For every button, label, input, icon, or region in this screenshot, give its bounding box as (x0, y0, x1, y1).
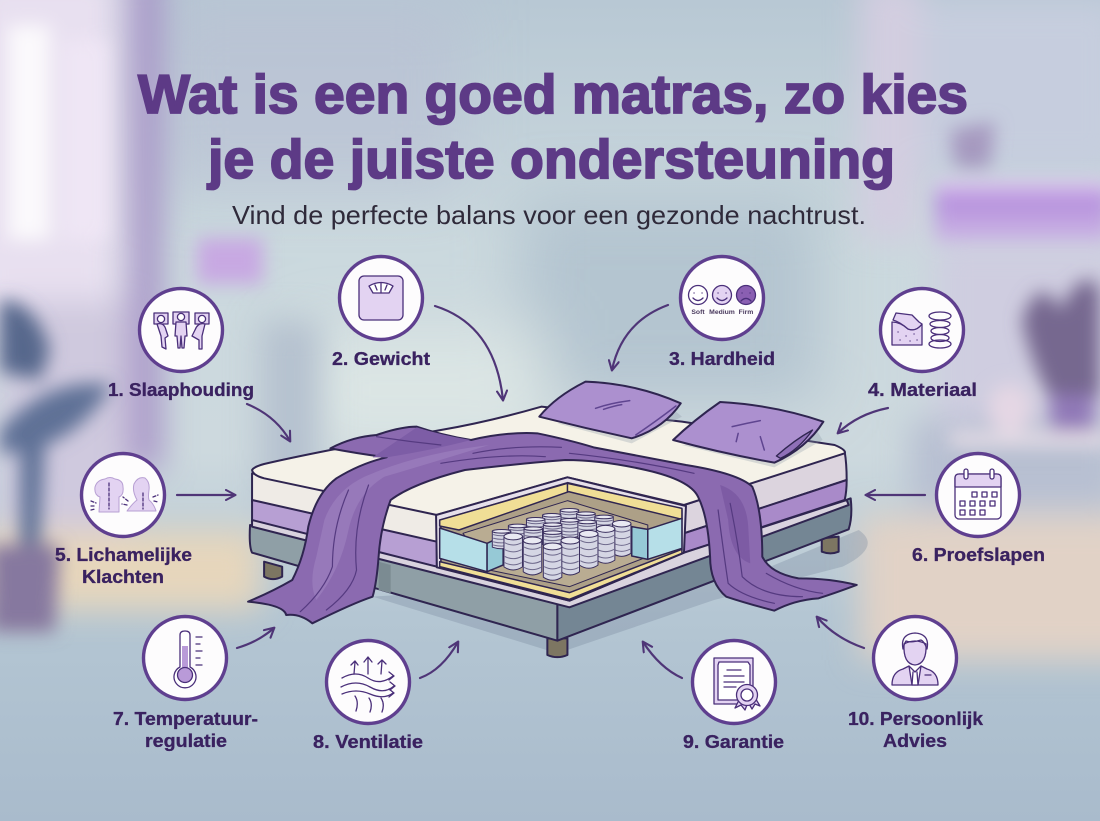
item 1: Slaaphouding (108, 288, 254, 400)
arrow: 6 (866, 494, 925, 496)
bed legs (264, 537, 839, 657)
label: 9. Garantie (683, 732, 784, 752)
label: 4. Materiaal (868, 380, 977, 400)
top comfort layer (440, 483, 682, 530)
arrow: 10 (817, 617, 864, 648)
arrow: 7 (237, 628, 274, 648)
label: 3. Hardheid (669, 349, 775, 369)
bed shadow on floor (373, 530, 868, 653)
subtitle: Vind de perfecte balans voor een gezonde nachtrust. (232, 200, 866, 230)
title (138, 63, 968, 190)
arrow: 2 (435, 306, 503, 400)
icon: weighing scale (340, 256, 422, 340)
icon: advisor in suit (874, 616, 956, 700)
label: 7. Temperatuur- (113, 709, 258, 729)
label: regulatie (145, 731, 227, 751)
item 9: Garantie (683, 640, 784, 752)
pocket springs (492, 509, 631, 580)
icon: back and neck pain (82, 454, 164, 536)
item 5: Lichamelijke Klachten (55, 454, 192, 587)
label (848, 709, 984, 751)
arrow: 3 (612, 305, 668, 370)
mattress bands (252, 452, 849, 607)
item 2: Gewicht (332, 256, 430, 369)
title: Wat is een goed matras, zo kies (138, 63, 968, 125)
arrow: 5 (177, 494, 235, 496)
icon: firmness faces: Soft (691, 309, 705, 316)
icon: thermometer (144, 616, 226, 700)
arrow: 8 (420, 642, 458, 678)
mattress top surface (252, 407, 845, 515)
item 8: Ventilatie (313, 640, 423, 752)
icon: foam and spring (880, 288, 964, 372)
label (113, 709, 258, 751)
arrows (177, 305, 925, 678)
label: 10. Persoonlijk (848, 709, 984, 729)
label: 8. Ventilatie (313, 732, 423, 752)
label: 1. Slaaphouding (108, 380, 254, 400)
item 10: Persoonlijk Advies (848, 616, 984, 751)
label: Klachten (82, 567, 164, 587)
icon: firmness faces (680, 256, 764, 340)
foam edges (440, 528, 487, 572)
icon: airflow through mattress (326, 640, 410, 724)
item 3: Hardheid (669, 256, 775, 369)
label: Advies (883, 731, 947, 751)
icon: calendar (936, 454, 1020, 536)
icon: sleeping positions (140, 288, 222, 372)
bottom support layer (440, 549, 682, 599)
cutaway section (436, 477, 686, 601)
icon: certificate (692, 640, 776, 724)
item 6: Proefslapen (912, 454, 1045, 565)
illustration: bed with mattress cutaway (248, 382, 868, 657)
item 7: Temperatuurregulatie (113, 616, 258, 751)
arrow: 4 (838, 408, 888, 433)
title: je de juiste ondersteuning (207, 128, 895, 190)
bed base (250, 498, 851, 641)
arrow: 1 (247, 404, 290, 441)
icon: firmness faces: Firm (739, 309, 753, 316)
label: 6. Proefslapen (912, 545, 1045, 565)
pillows (539, 382, 823, 467)
label: 5. Lichamelijke (55, 545, 192, 565)
purple blanket (248, 427, 857, 623)
label: 2. Gewicht (332, 349, 430, 369)
label (55, 545, 192, 587)
icon: firmness faces: Medium (709, 309, 735, 316)
arrow: 9 (643, 642, 682, 678)
item 4: Materiaal (868, 288, 977, 400)
